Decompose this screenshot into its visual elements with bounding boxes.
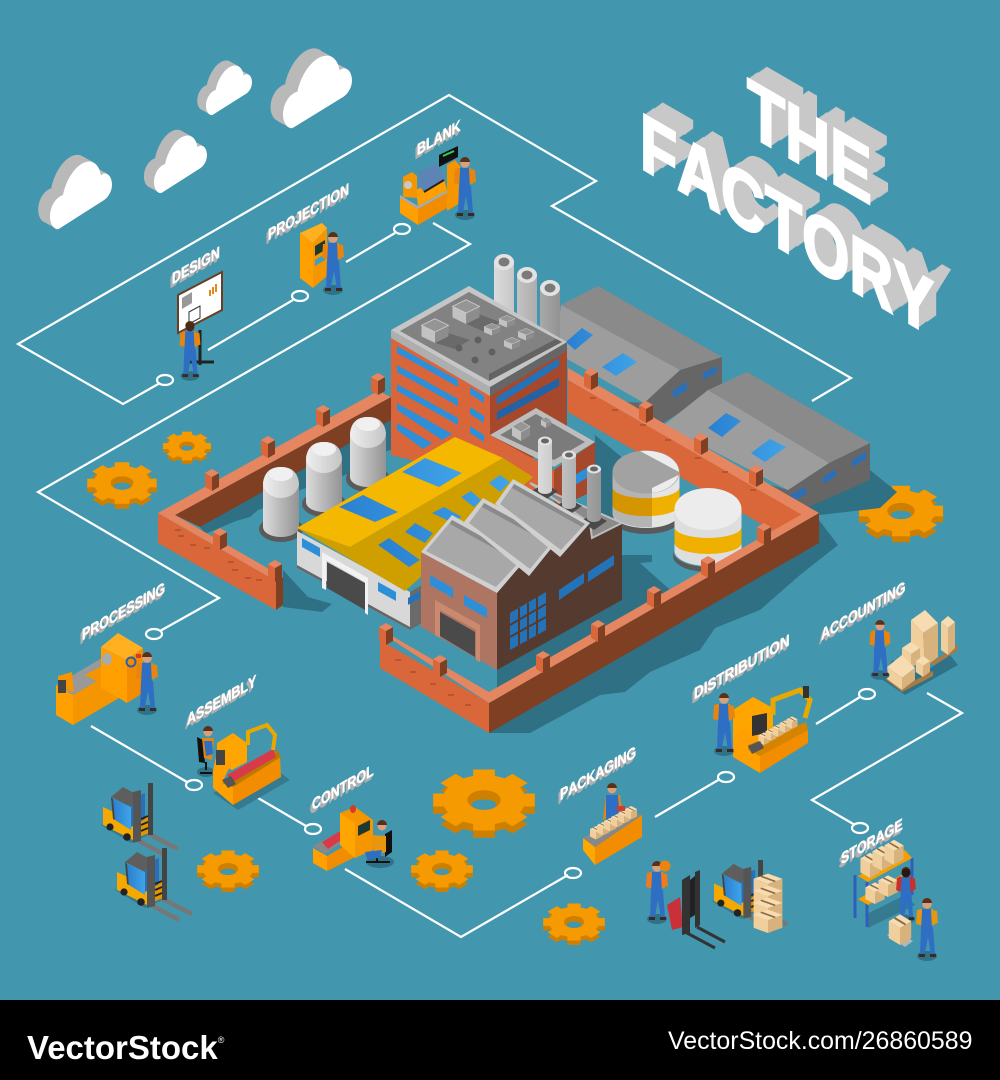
brick wall: rear left <box>158 373 391 527</box>
footer logo text: VectorStock® <box>27 1029 224 1066</box>
label: assembly: ASSEMBLY <box>187 672 256 730</box>
forklift 3 with boxes <box>712 860 788 933</box>
station: processing <box>56 633 158 725</box>
brick wall: front right <box>379 513 819 733</box>
station: packaging <box>583 783 642 865</box>
station: storage <box>855 840 938 961</box>
ground shadows <box>200 418 897 733</box>
label: design: DESIGN <box>172 244 220 288</box>
footer url text: VectorStock.com/26860589 <box>668 1027 972 1055</box>
label: processing: PROCESSING <box>82 579 165 644</box>
label: accounting: ACCOUNTING <box>821 579 906 644</box>
label: projection: PROJECTION <box>268 181 349 244</box>
footer watermark band <box>0 1000 1000 1080</box>
brick wall: rear right <box>568 368 819 532</box>
icon: cloud 2 <box>144 130 207 193</box>
icon: clouds <box>38 48 352 229</box>
station: projection <box>300 223 344 295</box>
yellow roofed building <box>297 437 533 630</box>
storage tank B <box>673 488 743 572</box>
station: accounting <box>870 610 958 695</box>
label: control: CONTROL <box>312 762 374 814</box>
station: design <box>178 272 222 381</box>
hangar 2 <box>664 372 870 510</box>
brick wall: front left <box>158 513 283 610</box>
silos <box>259 417 390 542</box>
icon: gears <box>87 432 943 945</box>
icon: cloud 4 <box>271 48 352 128</box>
flow lines <box>18 95 962 937</box>
icon: cloud 1 <box>38 155 112 229</box>
chimneys: main building <box>494 254 560 351</box>
hangar 1 <box>555 286 722 425</box>
forklift 2 <box>115 848 192 920</box>
station: blank <box>400 146 476 225</box>
icon: cloud 3 <box>197 60 252 115</box>
brown factory building <box>421 436 622 670</box>
label: distribution: DISTRIBUTION <box>694 632 790 704</box>
small rooftop building <box>490 408 595 510</box>
pallet truck with worker <box>646 860 725 948</box>
station: control <box>313 805 394 871</box>
label: storage: STORAGE <box>841 816 903 868</box>
main brick building <box>391 286 567 480</box>
chimneys: front building <box>531 436 607 530</box>
storage tank A <box>611 450 681 534</box>
forklift 1 <box>101 783 178 855</box>
factory complex <box>158 254 897 733</box>
label: blank: BLANK <box>417 117 461 160</box>
station: assembly <box>197 725 290 810</box>
title: THE: THE <box>747 61 872 222</box>
label: packaging: PACKAGING <box>560 743 636 804</box>
title: FACTORY: FACTORY <box>640 95 934 354</box>
station: distribution <box>713 686 810 773</box>
